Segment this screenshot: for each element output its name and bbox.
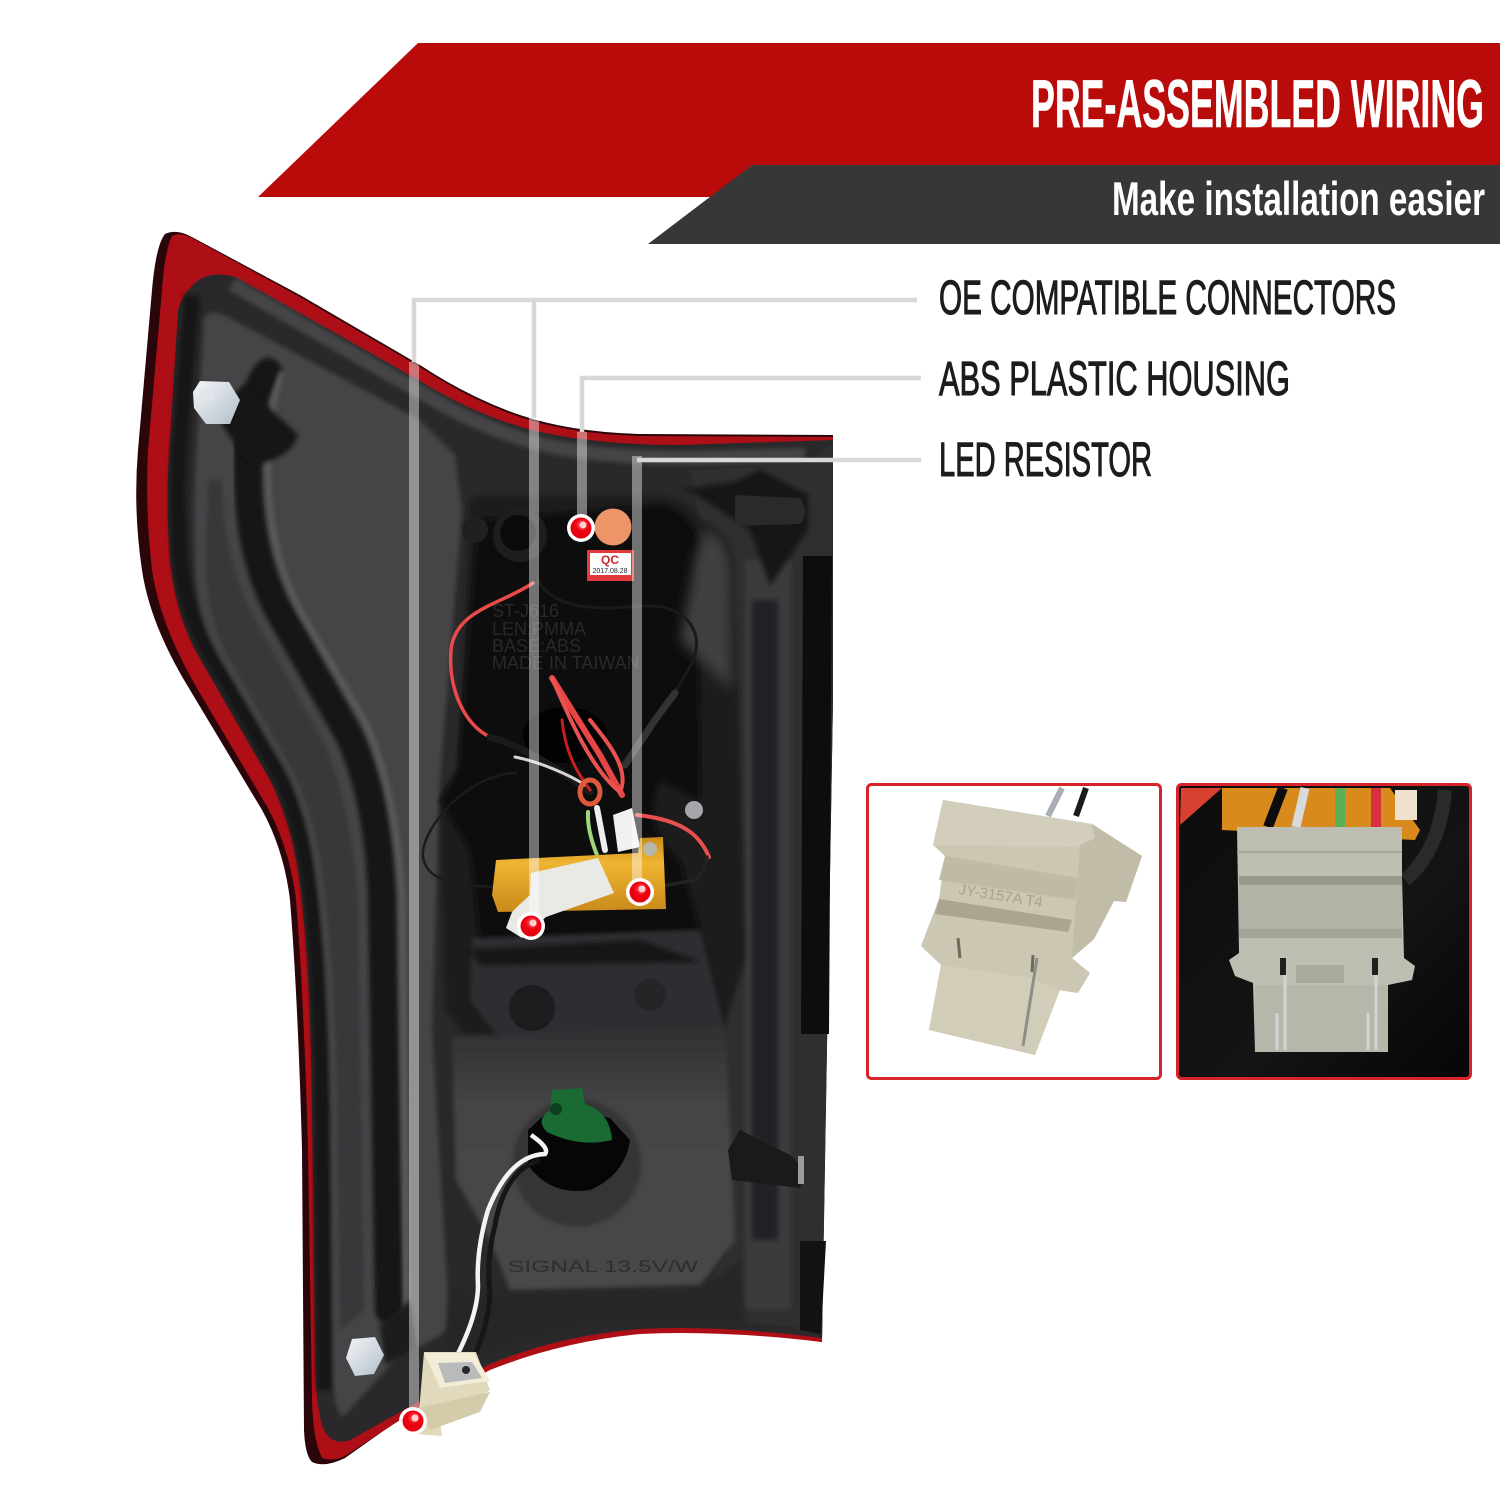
left grey panel [194, 312, 462, 1416]
label: LED resistor: LED RESISTOR [939, 434, 1152, 487]
connector groove [1239, 878, 1402, 929]
bulb hole ring [513, 1099, 641, 1227]
dot: housing [567, 514, 595, 542]
marker dots [399, 514, 654, 1435]
connector body [1229, 827, 1415, 1052]
bracket top right [680, 470, 808, 585]
header banner: red ribbon [258, 43, 1500, 197]
inner red wire [562, 720, 590, 790]
black wire [468, 1160, 540, 1370]
subheader banner: dark ribbon [648, 165, 1500, 244]
black wire down [605, 800, 615, 865]
small round recess [509, 985, 555, 1031]
socket opening [523, 707, 607, 763]
right lighter column [745, 560, 791, 1310]
right vertical channel [752, 600, 778, 1240]
embossed moulded text: ST-J616 [492, 601, 559, 621]
lower peg [728, 1130, 802, 1188]
QC sticker: 2017.08.28 [592, 568, 628, 575]
beige bulb connector [416, 1352, 490, 1436]
connector body [921, 800, 1142, 1055]
connector left pin [1277, 962, 1285, 1050]
connector black wire [1076, 788, 1086, 816]
translucent bands over lamp [414, 362, 637, 1415]
lower boss [380, 1300, 418, 1365]
embossed moulded text [492, 601, 640, 673]
LED resistor body [492, 837, 666, 912]
connector groove shadow [1239, 876, 1402, 885]
rear housing [168, 275, 833, 1442]
white plug on resistor [506, 858, 614, 938]
connector slots [958, 938, 1033, 972]
connector slots [1283, 958, 1375, 975]
embossed base text: SIGNAL 13.5V/W [508, 1257, 698, 1276]
wire black [1268, 788, 1283, 827]
lower nut [346, 1337, 384, 1376]
panel: connector on white [868, 784, 1160, 1078]
connector moulded text: JY-3157A T4 [957, 881, 1044, 911]
QC sticker [587, 550, 634, 581]
wire red [1371, 788, 1381, 827]
grommet core [500, 515, 536, 551]
corner screw boss [462, 517, 488, 543]
green wire [588, 812, 597, 855]
dark cable [1405, 790, 1445, 880]
white plug edge [1395, 790, 1417, 820]
bulb hole [528, 1105, 630, 1191]
leader lines [414, 300, 921, 1415]
connector centre notch [1296, 965, 1344, 983]
right black wire [663, 857, 707, 886]
red wire left [451, 583, 533, 737]
lower grey lens box [452, 1026, 735, 1290]
wire green [1335, 788, 1345, 827]
connector wires [1048, 788, 1062, 816]
red wire corner [1180, 788, 1222, 825]
sleeve [625, 693, 675, 765]
resistor screw [643, 842, 657, 856]
orange background [1222, 788, 1420, 840]
left dark rim [178, 295, 325, 1390]
black side bar lower [800, 1241, 826, 1334]
line to resistor label [637, 458, 921, 462]
line to connectors label [414, 300, 917, 418]
white wire down [597, 808, 605, 850]
upper bolt stud [201, 388, 215, 402]
embossed moulded text: BASE:ABS [492, 636, 581, 656]
white bundle wire [515, 757, 585, 785]
right red wire [637, 815, 709, 857]
embossed moulded text: LEN:PMMA [492, 619, 586, 639]
circuit board holes [550, 1103, 562, 1115]
connector top ridge line [1237, 851, 1402, 853]
connector side face [1072, 824, 1142, 958]
mid shelf [470, 930, 725, 1040]
dot: connector on resistor [517, 912, 545, 940]
feature labels [939, 272, 1396, 487]
black wiring recess [440, 505, 700, 945]
line to housing label [582, 378, 921, 432]
groove highlight [268, 372, 407, 1310]
connector metal pin [1023, 958, 1037, 1046]
central raised box [440, 495, 745, 1040]
black side bar upper [801, 556, 832, 1034]
right shoulder highlight [680, 530, 732, 690]
connector lower plug [929, 965, 1060, 1055]
dot: bulb connector [399, 1407, 427, 1435]
tail light photo illustration [136, 232, 833, 1464]
left groove side panel [206, 480, 364, 1330]
upper rim highlight [232, 284, 805, 458]
label: ABS plastic housing: ABS PLASTIC HOUSING [939, 353, 1290, 406]
red lens band [147, 234, 833, 1460]
connector right pin [1368, 962, 1376, 1050]
connector ridge [935, 899, 1072, 932]
upper bolt [193, 381, 240, 424]
shelf dark band [470, 940, 700, 965]
white wire [448, 1135, 546, 1372]
thin black loop wire [423, 773, 517, 887]
lower right bump [440, 1260, 745, 1375]
right housing strip [690, 445, 833, 1330]
red loop one [552, 678, 622, 795]
lens outer edge [136, 232, 833, 1464]
orange sticker [594, 508, 632, 546]
grommet [493, 508, 547, 562]
black moulded groove [248, 372, 389, 1310]
screw [685, 801, 703, 819]
wiring tag [613, 808, 640, 852]
connector upper groove shadow [939, 856, 1078, 900]
panel: connector on dark [1178, 784, 1470, 1078]
small round dimple [634, 979, 666, 1011]
lower peg highlight [798, 1156, 804, 1184]
QC sticker: QC [601, 553, 619, 567]
wiring harness [423, 581, 709, 887]
orange tie [580, 780, 600, 804]
red loop two [552, 678, 623, 792]
connector plug [1255, 985, 1388, 1052]
dot: resistor [626, 878, 654, 906]
heat shrink bundle [490, 737, 590, 792]
connector head face [933, 800, 1095, 847]
green circuit board [542, 1088, 612, 1143]
long black wire [538, 581, 697, 765]
connector lower ledge line [1239, 929, 1402, 938]
bracket peg [735, 495, 805, 526]
upper boss [222, 385, 298, 465]
wire white [1296, 788, 1305, 827]
embossed moulded text: MADE IN TAIWAN [492, 653, 640, 673]
